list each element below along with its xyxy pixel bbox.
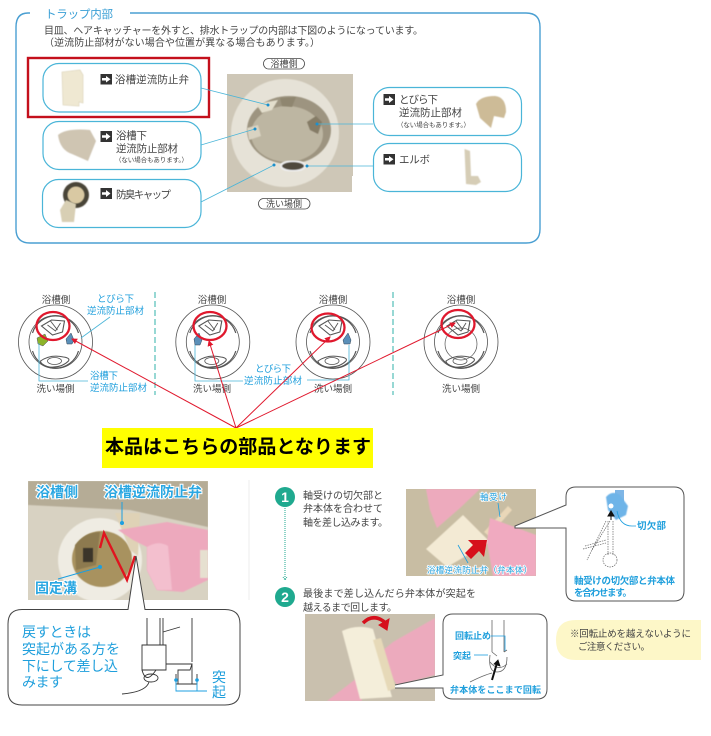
callout: under-door backflow part: （ない場合もあります。）	[397, 120, 470, 129]
step 1 photo: 軸受け	[480, 492, 507, 502]
photo labels: 浴槽側	[36, 484, 78, 500]
callout text: みます	[22, 674, 63, 690]
step 1 badge: 1	[281, 489, 289, 505]
step 2	[275, 587, 547, 701]
step 2 photo	[305, 614, 435, 701]
banner: this product is this part	[102, 428, 373, 468]
diagram 4: 浴槽側	[447, 294, 475, 306]
photo: inserting valve	[28, 481, 208, 602]
label: protrusion: 起	[212, 684, 226, 700]
diagram 1: 洗い場側	[36, 383, 75, 395]
diagram 3: 浴槽側	[319, 294, 347, 306]
diagram 2: とびら下	[255, 364, 291, 375]
diagram 2: 浴槽側	[198, 294, 226, 306]
panel: trap interior	[16, 7, 540, 243]
step 1 detail box: 切欠部	[637, 520, 666, 532]
label: protrusion: 突	[212, 669, 226, 685]
diagram 1: 浴槽側	[42, 294, 70, 306]
diagram 1: とびら下	[97, 294, 134, 305]
note: caution	[556, 620, 701, 660]
callout: under-door backflow part: 逆流防止部材	[399, 106, 462, 119]
step 1 badge	[275, 487, 295, 507]
callout: odor cap: 防臭キャップ	[116, 188, 172, 201]
callout: under-bathtub backflow part: 逆流防止部材	[116, 142, 178, 155]
red highlight circles	[36, 310, 474, 342]
step 1 detail box: 軸受けの切欠部と弁本体	[574, 575, 675, 587]
label: protrusion	[174, 669, 226, 700]
rotation stop drawing	[470, 620, 507, 682]
note: caution: ※回転止めを越えないように	[570, 628, 691, 640]
label: bathtub side	[264, 58, 304, 69]
intro text: （逆流防止部材がない場合や位置が異なる場合もあります。）	[44, 36, 320, 49]
photo labels	[35, 484, 202, 596]
callout: bathtub backflow valve	[43, 64, 201, 112]
diagram 3: 洗い場側	[314, 383, 352, 395]
divider 2	[392, 292, 394, 395]
callout text: 戻すときは	[22, 624, 91, 640]
intro text: 目皿、ヘアキャッチャーを外すと、排水トラップの内部は下図のようになっています。	[44, 24, 423, 37]
step 2 badge	[275, 587, 295, 607]
step 2 detail box: 回転止め	[455, 630, 491, 641]
dotted connector	[283, 508, 287, 580]
highlight frame	[28, 58, 209, 117]
callout: bathtub backflow valve: 浴槽逆流防止弁	[115, 73, 189, 86]
callout text: 下にして差し込	[22, 658, 118, 674]
diagram 4	[424, 294, 498, 395]
bearing notch drawing	[583, 490, 636, 567]
step 1 text	[303, 489, 388, 529]
label: washing area side	[258, 198, 310, 209]
step 2 text: 最後まで差し込んだら弁本体が突起を	[303, 587, 476, 600]
line drawing: valve with protrusion	[122, 618, 197, 694]
note: caution: ご注意ください。	[578, 641, 650, 653]
step 2 badge: 2	[281, 589, 289, 605]
diagram 1: 逆流防止部材	[90, 382, 147, 394]
diagram 1: 浴槽下	[90, 370, 118, 382]
step 1 text: 弁本体を合わせて	[303, 502, 383, 515]
photo: drain trap	[227, 74, 353, 192]
diagram row: part positions	[18, 292, 498, 428]
diagram 3	[296, 294, 370, 395]
step 1 detail box: を合わせます。	[574, 587, 632, 599]
step 2 detail box: 突起	[453, 650, 471, 661]
callout text: 突起がある方を	[22, 641, 120, 657]
red zigzag arrow	[100, 533, 135, 580]
diagram 2: 洗い場側	[193, 383, 231, 395]
callout: under-bathtub backflow part: （ない場合もあります。）	[115, 155, 188, 164]
callout text	[22, 624, 120, 690]
intro text	[44, 24, 423, 49]
callout: elbow	[374, 144, 522, 192]
step 1 text: 軸を差し込みます。	[303, 516, 388, 529]
label: bathtub side: 浴槽側	[270, 58, 298, 69]
diagram 1: 逆流防止部材	[87, 305, 144, 317]
step 2 text: 越えるまで回します。	[303, 601, 397, 614]
step 1 detail box	[515, 487, 684, 601]
faint divider	[248, 480, 250, 600]
step 2 detail box	[395, 614, 547, 699]
step 1 text: 軸受けの切欠部と	[303, 489, 383, 502]
step 1 photo: 浴槽逆流防止弁（弁本体）	[427, 565, 532, 575]
divider 1	[154, 292, 156, 395]
diagram 2	[176, 294, 302, 395]
diagram 4: 洗い場側	[442, 383, 480, 395]
callout: under-bathtub backflow part: 浴槽下	[116, 129, 147, 142]
step 1 photo	[406, 489, 536, 576]
diagram 1	[18, 294, 147, 395]
heading: trap interior: トラップ内部	[45, 7, 114, 21]
diagram 2: 逆流防止部材	[244, 375, 302, 387]
callout: under-door backflow part	[374, 88, 522, 136]
callout: under-door backflow part: とびら下	[399, 94, 438, 106]
callout: under-bathtub backflow part	[43, 122, 201, 170]
photo labels: 浴槽逆流防止弁	[104, 484, 202, 500]
callout: elbow: エルボ	[399, 154, 430, 166]
photo labels: 固定溝	[35, 580, 77, 596]
step 2 text	[303, 587, 476, 614]
step 2 detail box: 弁本体をここまで回転	[450, 684, 541, 695]
callout: odor cap	[42, 180, 201, 228]
leader lines	[201, 88, 373, 202]
banner: this product is this part: 本品はこちらの部品となります	[105, 436, 371, 458]
callout: how to reinsert	[8, 556, 240, 705]
label: washing area side: 洗い場側	[266, 198, 302, 209]
step 1	[275, 487, 684, 601]
red pointer lines	[72, 323, 455, 428]
